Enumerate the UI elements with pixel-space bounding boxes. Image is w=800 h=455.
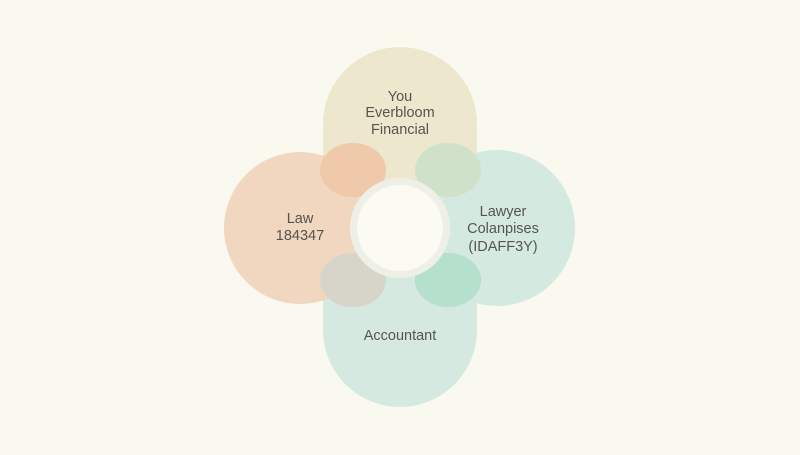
label: top xyxy=(365,89,435,138)
petal: top xyxy=(323,47,477,228)
overlap: bottom-right xyxy=(415,253,481,307)
overlap: top-left xyxy=(320,143,386,197)
label: left xyxy=(276,211,324,244)
label: left: 184347 xyxy=(276,228,324,244)
label: right: (IDAFF3Y) xyxy=(468,239,538,255)
overlap: bottom-left xyxy=(320,253,386,307)
overlap: top-right xyxy=(415,143,481,197)
label: top: Everbloom xyxy=(365,105,435,121)
label: top: You xyxy=(388,89,412,105)
label: right: Colanpises xyxy=(467,221,539,237)
label: right xyxy=(467,204,539,255)
petal: right xyxy=(419,150,575,306)
label: right: Lawyer xyxy=(480,204,527,220)
petal: left xyxy=(224,152,376,304)
label: left: Law xyxy=(287,211,314,227)
label: top: Financial xyxy=(371,122,429,138)
center ring xyxy=(350,178,450,278)
label: bottom: Accountant xyxy=(364,328,436,344)
petal: bottom xyxy=(323,228,477,407)
